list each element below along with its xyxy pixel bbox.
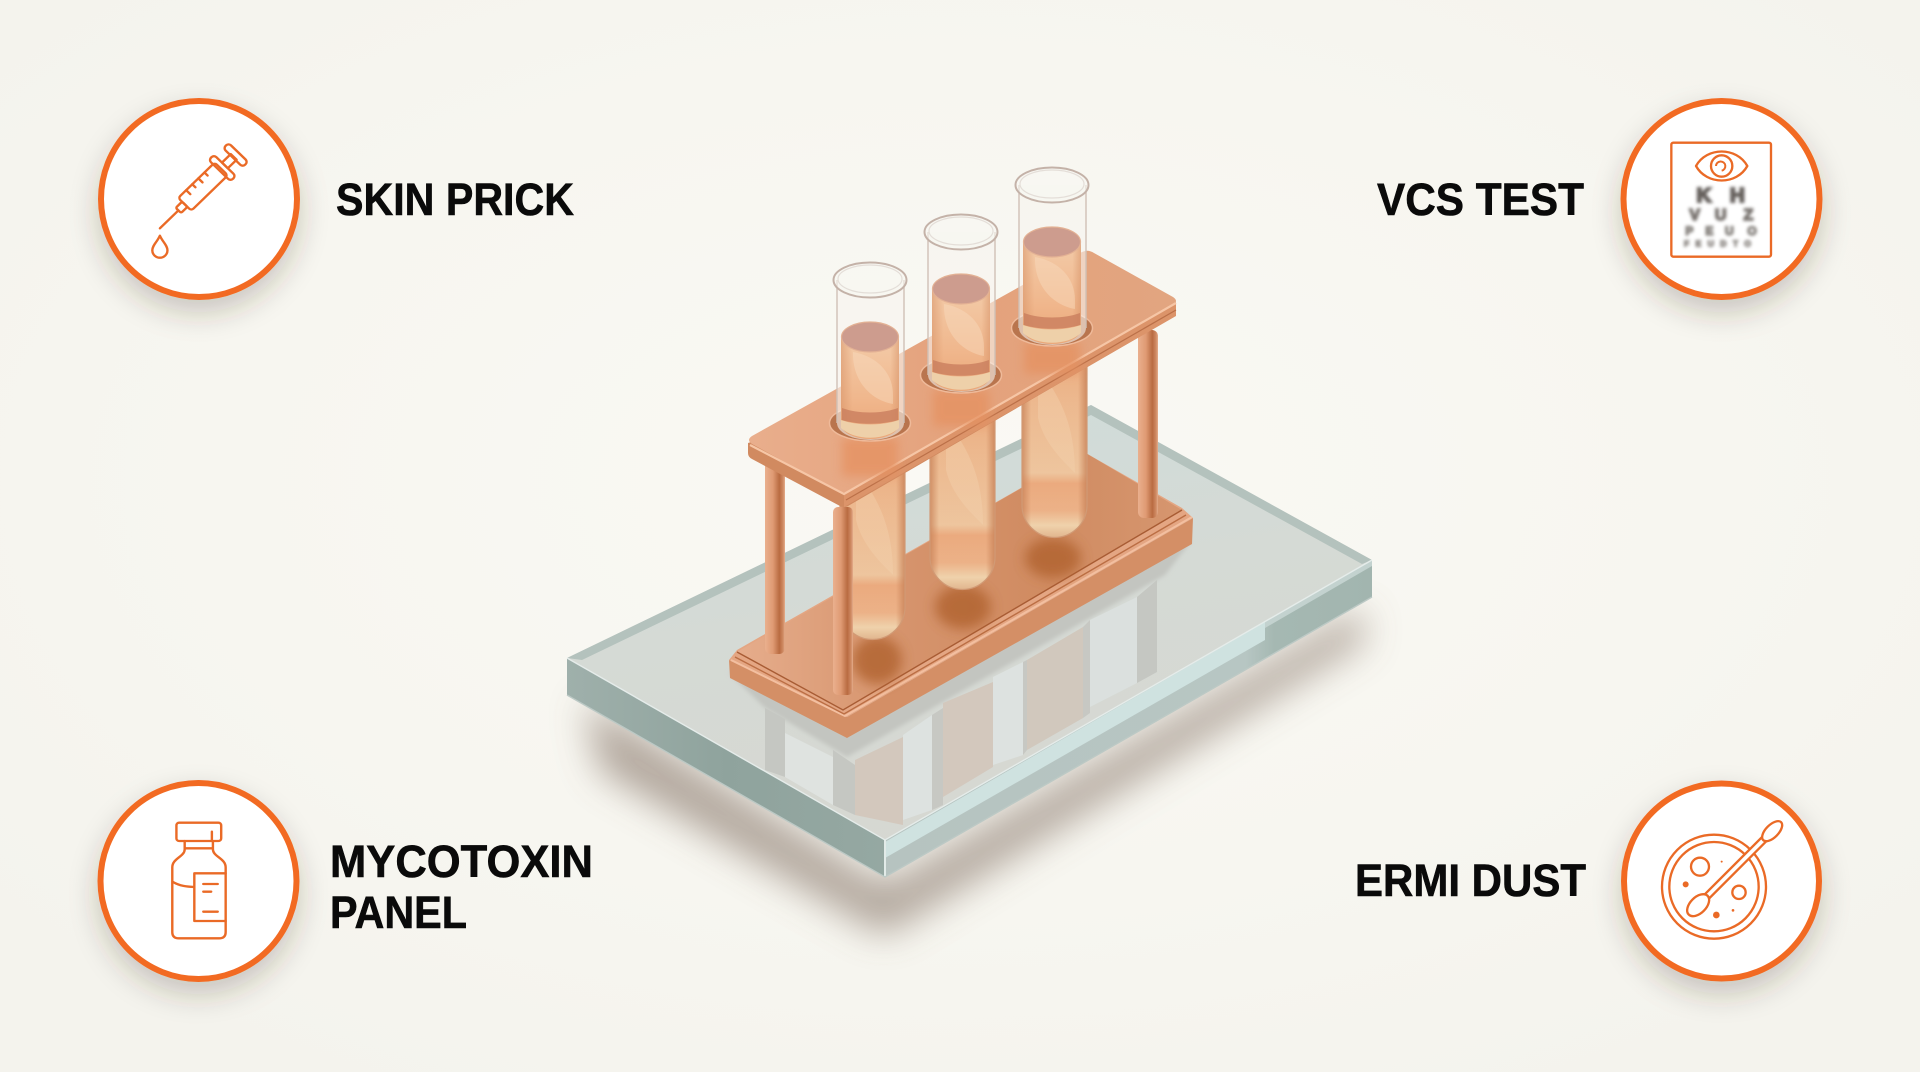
- icon: eye chart: Z: [1743, 207, 1753, 224]
- test rack on glass slab illustration: [567, 168, 1372, 935]
- icon: eye chart: P: [1685, 224, 1693, 238]
- upper tube left: [830, 262, 910, 441]
- item: mycotoxin panel: [100, 783, 606, 979]
- icon: eye chart: [1671, 143, 1771, 257]
- icon: eye chart: H: [1730, 184, 1745, 207]
- label: SKIN PRICK: [336, 174, 574, 225]
- icon: eye chart: E: [1705, 224, 1713, 238]
- label: PANEL: [330, 887, 467, 938]
- lower tube bodies: [840, 328, 1087, 640]
- item: ermi dust: [1355, 784, 1819, 978]
- icon: eye chart: O: [1747, 224, 1757, 238]
- upper tube middle: [920, 214, 1002, 393]
- badge circle: [100, 783, 296, 979]
- icon: eye chart: V: [1689, 207, 1700, 224]
- badge circle: [101, 101, 297, 297]
- front leg: [833, 507, 853, 695]
- copper base plate: [729, 452, 1193, 738]
- upper tube right: [1012, 168, 1092, 346]
- label: MYCOTOXIN: [330, 836, 593, 887]
- copper top plate: [748, 251, 1176, 507]
- glass slab: [567, 405, 1372, 877]
- icon: vial: [172, 823, 226, 938]
- label: ERMI DUST: [1355, 855, 1586, 906]
- item: skin prick: [101, 101, 574, 297]
- icon: eye chart: K: [1697, 184, 1712, 207]
- tube reflections on base: [852, 538, 1081, 684]
- icon: petri dish with swab: [1662, 817, 1787, 939]
- icon: eye chart: U: [1725, 224, 1734, 238]
- icon: syringe with droplet: [149, 142, 249, 258]
- icon: eye chart: U: [1715, 207, 1726, 224]
- slab cast shadow: [585, 610, 1365, 935]
- icon: eye chart: FEUDTO: [1684, 239, 1757, 249]
- label: VCS TEST: [1377, 174, 1584, 225]
- tube reflections on plate: [842, 342, 1080, 476]
- badge circle: [1624, 101, 1820, 297]
- base reflections on glass: [728, 540, 1192, 825]
- item: vcs test: [1377, 101, 1820, 297]
- rear legs: [765, 330, 1158, 654]
- badge circle: [1624, 784, 1819, 978]
